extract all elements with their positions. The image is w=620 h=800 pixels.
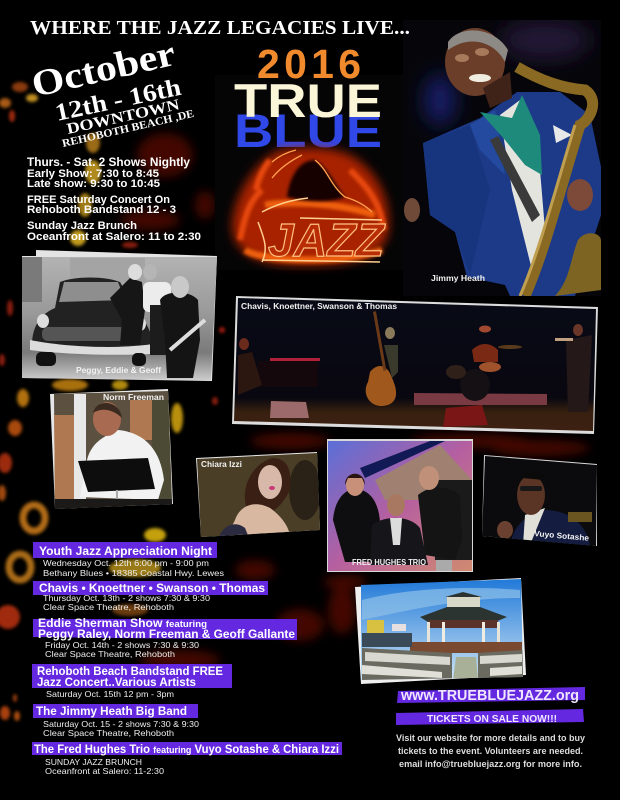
logo flames [232,148,389,266]
title: WHERE THE JAZZ LEGACIES LIVE... [30,17,410,39]
tall man [418,488,435,557]
drum kit [414,393,547,405]
car [32,278,152,352]
downtown: DOWNTOWN [65,96,181,138]
show times: Rehoboth Bandstand 12 - 3 [27,204,176,216]
Jimmy Heath caption: Jimmy Heath [431,274,485,283]
piano and pianist [270,358,320,361]
show times: Early Show: 7:30 to 8:45 [27,168,159,180]
Chavis caption: Chavis, Knoettner, Swanson & Thomas [241,302,398,311]
trumpet player [566,335,592,412]
event: jimmy heath big band: Saturday Oct. 15 - 2 shows 7:30 & 9:30 [43,719,199,729]
flame jazz lettering: JAZZ [268,214,386,266]
photo: Vuyo Sotashe [480,455,598,547]
info text: email info@truebluejazz.org for more info. [399,759,582,769]
info text: tickets to the event. Volunteers are needed. [398,746,583,756]
info text: Visit our website for more details and to buy [396,733,585,743]
event: chavis quartet: Chavis • Knoettner • Swanson • Thomas [39,581,265,595]
event: chavis quartet: Thursday Oct. 13th - 2 shows 7:30 & 9:30 [43,593,210,603]
Norm caption: Norm Freeman [103,393,164,402]
photo: Norm Freeman [50,389,175,511]
saxophone [517,67,593,296]
event: youth jazz night [33,542,224,578]
show times: Sunday Jazz Brunch [27,220,137,232]
tickets banner: TICKETS ON SALE NOW!!! [427,713,557,725]
event: fred hughes trio: Oceanfront at Salero: 11-2:30 [45,766,164,776]
event: jimmy heath big band [33,704,199,738]
event: bandstand concert: Rehoboth Beach Bandstand FREE [37,664,223,678]
music stand [78,458,155,492]
event: fred hughes trio: The Fred Hughes Trio featuring Vuyo Sotashe & Chiara Izzi [34,742,339,756]
Fred caption: FRED HUGHES TRIO [352,558,426,567]
event: eddie sherman show [33,616,297,659]
event: youth jazz night: Wednesday Oct. 12th 6:00 pm - 9:00 pm [43,558,209,568]
figures [110,278,145,345]
event: youth jazz night: Bethany Blues • 18385 Coastal Hwy. Lewes [43,568,224,578]
Vuyo caption: Vuyo Sotashe [534,529,590,543]
show times: Late show: 9:30 to 10:45 [27,178,160,190]
event: youth jazz night: Youth Jazz Appreciation Night [39,544,212,558]
top-left embers [0,98,11,108]
front man [370,518,428,565]
location: REHOBOTH BEACH ,DE [61,108,195,150]
info text [396,733,585,769]
fiery background texture [0,82,590,721]
event: eddie sherman show: Clear Space Theatre, Rehoboth [45,649,175,659]
photo: Fred Hughes Trio [327,439,473,572]
event: eddie sherman show: Eddie Sherman Show featuring [38,616,207,630]
show times: Oceanfront at Salero: 11 to 2:30 [27,231,201,243]
double bass [366,366,396,406]
show times: Thurs. - Sat. 2 Shows Nightly [27,157,191,169]
Peggy caption: Peggy, Eddie & Geoff [76,366,161,375]
lower-left embers [52,379,88,391]
event: chavis quartet: Clear Space Theatre, Rehoboth [43,602,174,612]
event: bandstand concert: Saturday Oct. 15th 12 pm - 3pm [46,689,174,699]
pocket square [553,125,572,143]
tickets banner [396,709,584,725]
logo [215,41,405,270]
event: eddie sherman show: Friday Oct. 14th - 2 shows 7:30 & 9:30 [45,640,199,650]
show times: FREE Saturday Concert On [27,194,170,206]
shirt and scarf [500,100,545,270]
photo: Jimmy Heath [403,20,601,296]
suit [423,92,601,296]
website banner: www.TRUEBLUEJAZZ.org [400,687,579,704]
october: October [28,33,179,106]
show times [27,157,201,243]
event: chavis quartet [33,581,268,612]
photo: Rehoboth bandstand [355,578,526,684]
logo year: 2016 [257,41,361,87]
schedule [32,542,342,776]
bandstand roof [420,607,507,622]
speaker monitors [443,405,488,427]
event: eddie sherman show: Peggy Raley, Norm Freeman & Geoff Gallante [38,627,295,641]
event: bandstand concert [32,664,232,699]
event: jimmy heath big band: The Jimmy Heath Big Band [36,704,187,718]
buildings [367,620,384,633]
Chiara caption: Chiara Izzi [201,460,242,469]
event: fred hughes trio: SUNDAY JAZZ BRUNCH [45,757,142,767]
benches [362,648,452,680]
woman [333,489,380,562]
date block [28,33,195,150]
logo blue: BLUE [234,104,382,157]
event: jimmy heath big band: Clear Space Theatre, Rehoboth [43,728,174,738]
shirt [80,430,164,500]
photo: Chiara Izzi [195,452,321,540]
event: fred hughes trio [32,742,342,776]
photo: Peggy, Eddie & Geoff [20,250,220,385]
event: bandstand concert: Jazz Concert..Various Artists [37,675,196,689]
photo: Chavis, Knoettner, Swanson & Thomas [232,296,598,434]
hands [404,198,420,222]
date range: 12th - 16th [53,74,184,127]
logo true: TRUE [234,74,382,127]
head [445,28,505,96]
